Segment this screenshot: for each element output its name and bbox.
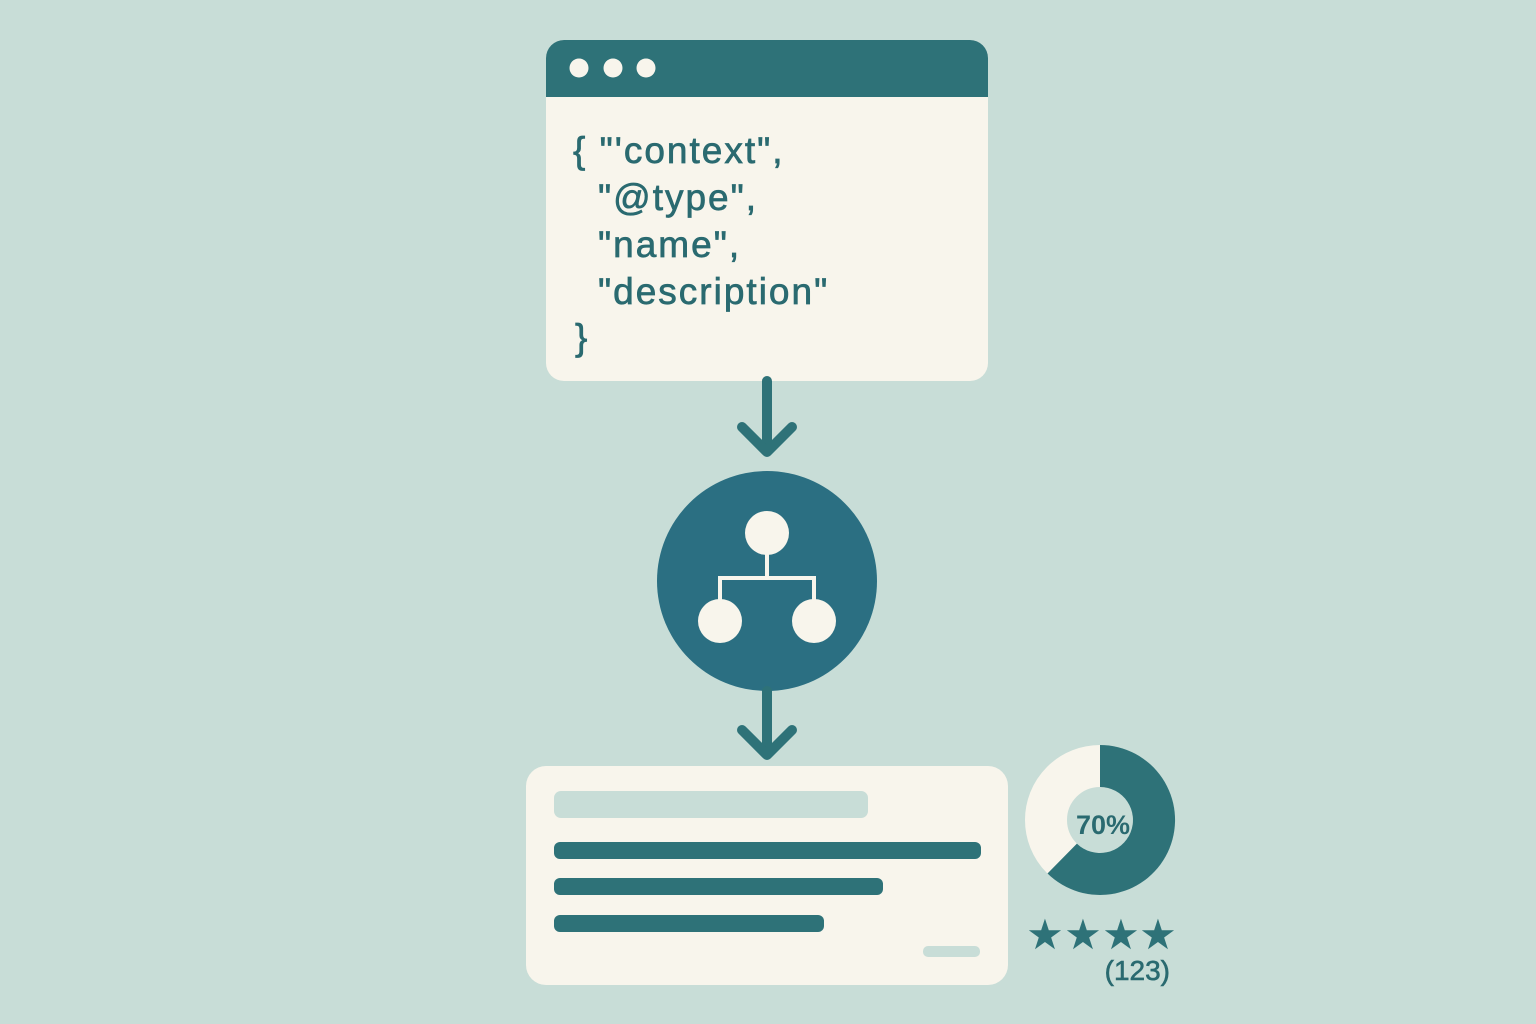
icon: rating stars: ★ — [1139, 910, 1177, 959]
code text: "description" — [598, 271, 829, 312]
panel: search result card — [526, 766, 1008, 985]
icon: rating stars — [1026, 910, 1177, 959]
icon: rating stars: ★ — [1102, 910, 1140, 959]
icon: structure hierarchy circle — [657, 471, 877, 691]
code text — [573, 130, 829, 358]
code text: } — [575, 317, 589, 358]
code text: "name", — [598, 224, 741, 265]
code text: { "'context", — [573, 130, 785, 171]
review count: (123) — [1105, 955, 1170, 986]
code text: "@type", — [598, 177, 758, 218]
arrow: structure to result — [742, 691, 792, 755]
icon: window dots — [570, 58, 656, 78]
chart: donut 70%: 70% — [1076, 810, 1130, 840]
chart: donut 70% — [1046, 745, 1175, 895]
icon: rating stars: ★ — [1064, 910, 1102, 959]
icon: rating stars: ★ — [1026, 910, 1064, 959]
arrow: code to structure — [742, 381, 792, 452]
panel: code browser window — [546, 40, 988, 381]
